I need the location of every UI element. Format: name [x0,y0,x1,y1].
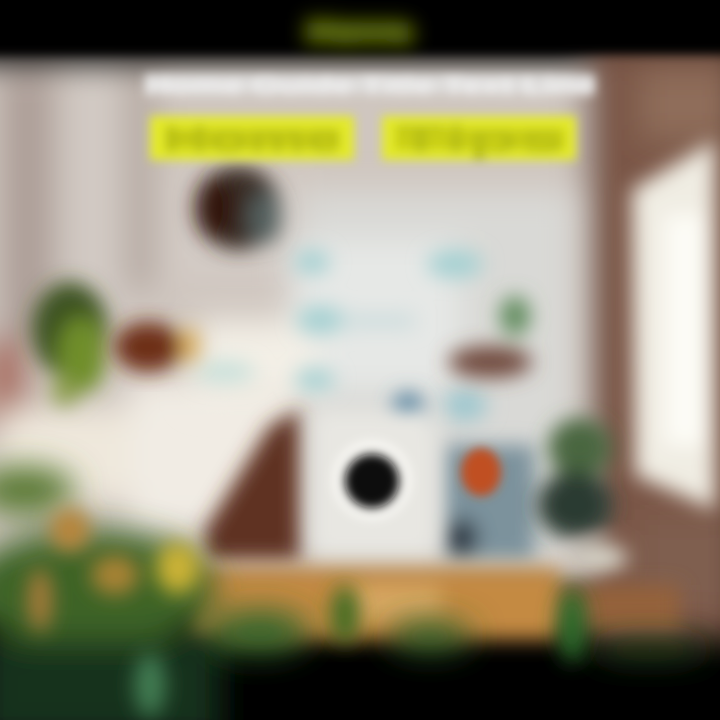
window [632,140,715,510]
black bottom band [230,668,720,720]
icon: dark green plant [537,418,628,572]
icon: light blue labels [195,250,487,421]
top label: Home [305,11,415,52]
icon: plant with brown shelf [448,296,532,378]
title: white line: Home Guide Title Text Line [145,70,595,101]
icon: hanging dark pot [195,166,281,250]
foreground leaves and yellow highlights [28,508,587,717]
icon: orange-brown pot [114,322,198,372]
brown cabinet [205,410,300,560]
title: yellow headline: Home [162,119,342,161]
icon: hanging green plant [32,282,108,406]
title: yellow headline [150,116,576,161]
foreground green plants [0,466,710,720]
panel: central infographic board [195,190,575,560]
icon: washing machine [312,410,436,556]
top black band [0,0,720,54]
title: yellow headline: Tips [395,119,565,161]
wooden counter [190,568,680,640]
icon: orange circle [461,448,501,496]
icon: blue-grey appliance area [393,393,535,560]
